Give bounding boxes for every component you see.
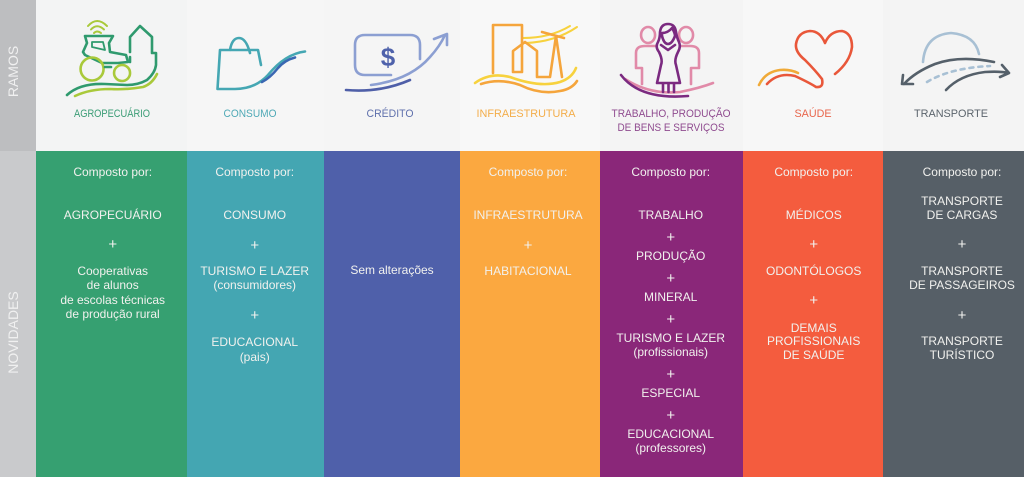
panel: transporte novidades: Composto por: [923, 165, 1001, 179]
panel: trabalho novidades: TRABALHO [638, 208, 703, 222]
panel: consumo novidades: (consumidores) [213, 278, 296, 292]
panel: agropecuário header [36, 0, 187, 151]
panel: consumo novidades: + [250, 237, 259, 254]
panel: transporte novidades: TURÍSTICO [930, 347, 994, 362]
icon: road and arrows [902, 33, 1009, 90]
panel: agropecuário novidades: de alunos [87, 278, 139, 292]
sidebar: novidades: NOVIDADES [5, 291, 21, 374]
panel: transporte novidades [883, 151, 1024, 477]
panel: saúde novidades: + [809, 292, 818, 309]
panel: agropecuário novidades: AGROPECUÁRIO [64, 207, 162, 222]
panel: agropecuário novidades [36, 151, 187, 477]
panel: consumo novidades [187, 151, 324, 477]
panel: saúde novidades: ODONTÓLOGOS [766, 263, 861, 278]
panel: trabalho novidades: (profissionais) [633, 345, 708, 359]
label: saúde: SAÚDE [794, 107, 832, 120]
panel: crédito header [324, 0, 460, 151]
icon: shopping bag [218, 38, 305, 89]
sidebar: novidades [0, 151, 36, 477]
panel: trabalho novidades [600, 151, 743, 477]
panel: transporte novidades: + [958, 236, 967, 253]
panel: transporte novidades: TRANSPORTE [921, 334, 1003, 348]
panel: infraestrutura novidades [460, 151, 600, 477]
panel: trabalho novidades: (professores) [635, 441, 706, 455]
label: infraestrutura: INFRAESTRUTURA [476, 108, 576, 120]
label: agropecuário: AGROPECUÁRIO [74, 107, 150, 120]
sidebar: ramos [0, 0, 36, 151]
panel: consumo novidades: TURISMO E LAZER [200, 264, 309, 278]
panel: trabalho novidades: PRODUÇÃO [636, 249, 705, 263]
panel: transporte novidades: TRANSPORTE [921, 194, 1003, 208]
icon: money and arrow: $ [381, 42, 396, 72]
panel: trabalho novidades: + [666, 407, 675, 424]
panel: trabalho novidades: TURISMO E LAZER [616, 331, 725, 345]
panel: consumo novidades: + [250, 307, 259, 324]
icon: three people [621, 24, 713, 97]
panel: trabalho novidades: + [666, 229, 675, 246]
panel: trabalho novidades: MINERAL [644, 290, 698, 304]
panel: trabalho novidades: + [666, 270, 675, 287]
panel: infraestrutura novidades: INFRAESTRUTURA [473, 208, 583, 222]
panel: trabalho novidades: ESPECIAL [641, 386, 700, 400]
panel: consumo novidades: CONSUMO [223, 208, 286, 222]
panel: agropecuário novidades: Composto por: [73, 165, 152, 179]
panel: saúde novidades: + [809, 236, 818, 253]
panel: consumo novidades: EDUCACIONAL [211, 335, 298, 349]
panel: transporte novidades: + [958, 307, 967, 324]
panel: transporte header [883, 0, 1024, 151]
panel: agropecuário novidades: + [108, 236, 117, 253]
panel: infraestrutura novidades: Composto por: [489, 165, 567, 179]
panel: saúde novidades: PROFISSIONAIS [767, 334, 860, 348]
panel: saúde novidades: MÉDICOS [786, 207, 842, 222]
panel: saúde header [743, 0, 883, 151]
icon: buildings and power line [475, 25, 577, 92]
panel: agropecuário novidades: de produção rural [66, 307, 160, 321]
panel: infraestrutura header [460, 0, 600, 151]
icon: heart [759, 31, 852, 87]
panel: saúde novidades: DEMAIS [791, 321, 837, 335]
panel: trabalho novidades: EDUCACIONAL [627, 427, 714, 441]
panel: saúde novidades [743, 151, 883, 477]
panel: transporte novidades: TRANSPORTE [921, 264, 1003, 278]
panel: consumo novidades: Composto por: [215, 165, 294, 179]
panel: trabalho novidades: + [666, 366, 675, 383]
panel: trabalho novidades: + [666, 311, 675, 328]
icon: money and arrow [346, 34, 447, 91]
panel: transporte novidades: DE CARGAS [927, 208, 997, 222]
panel: agropecuário novidades: Cooperativas [77, 264, 148, 278]
panel: trabalho header [600, 0, 743, 151]
panel: infraestrutura novidades: HABITACIONAL [484, 264, 572, 278]
label: trabalho, produção de bens e serviços: TRABALHO, PRODUÇÃO [612, 107, 731, 120]
panel: consumo header [187, 0, 324, 151]
panel: crédito novidades [324, 151, 460, 477]
sidebar: ramos: RAMOS [5, 46, 21, 97]
panel: saúde novidades: Composto por: [774, 165, 853, 179]
label: consumo: CONSUMO [224, 108, 277, 120]
label: transporte: TRANSPORTE [914, 108, 988, 120]
panel: crédito novidades: Sem alterações [350, 263, 434, 277]
label: trabalho, produção de bens e serviços: DE BENS E SERVIÇOS [618, 122, 724, 134]
panel: saúde novidades: DE SAÚDE [783, 347, 844, 362]
panel: trabalho novidades: Composto por: [631, 165, 710, 179]
panel: transporte novidades: DE PASSAGEIROS [909, 278, 1015, 292]
panel: agropecuário novidades: de escolas técnicas [60, 293, 165, 307]
panel: consumo novidades: (pais) [240, 350, 270, 364]
label: trabalho, produção de bens e serviços [612, 107, 731, 134]
panel: infraestrutura novidades: + [524, 237, 533, 254]
icon: tractor with farm [67, 21, 157, 96]
label: crédito: CRÉDITO [366, 107, 414, 120]
